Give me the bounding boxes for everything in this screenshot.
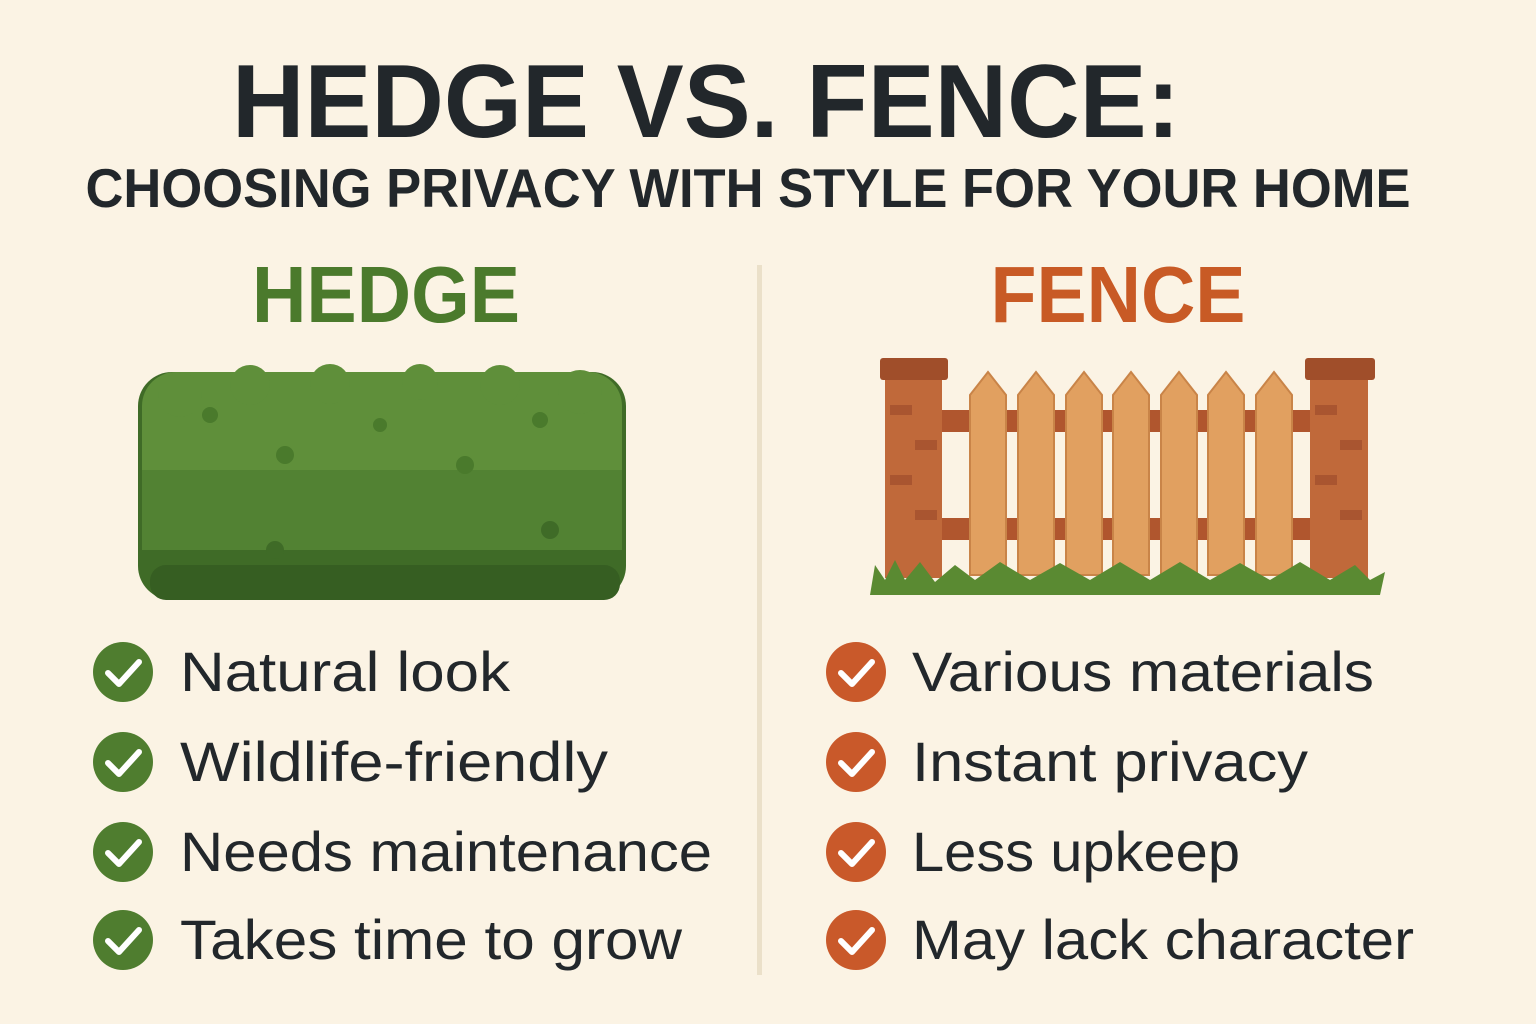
heading: hedge: HEDGE (252, 250, 520, 339)
item: upkeep: Less upkeep (912, 820, 1240, 883)
heading: fence: FENCE (990, 250, 1246, 339)
illustration: hedge (138, 364, 626, 600)
item: time: Takes time to grow (180, 908, 683, 971)
item: maintenance: Needs maintenance (180, 820, 712, 883)
title: HEDGE VS. FENCE: (232, 44, 1180, 160)
subtitle: CHOOSING PRIVACY WITH STYLE FOR YOUR HOME (86, 157, 1410, 219)
item: materials: Various materials (912, 640, 1374, 703)
item: natural look: Natural look (180, 640, 511, 703)
list: hedge (93, 640, 712, 971)
item: privacy: Instant privacy (912, 730, 1308, 793)
item: wildlife: Wildlife-friendly (180, 730, 608, 793)
list: fence (826, 640, 1414, 971)
illustration: fence (870, 358, 1385, 595)
item: character: May lack character (912, 908, 1414, 971)
